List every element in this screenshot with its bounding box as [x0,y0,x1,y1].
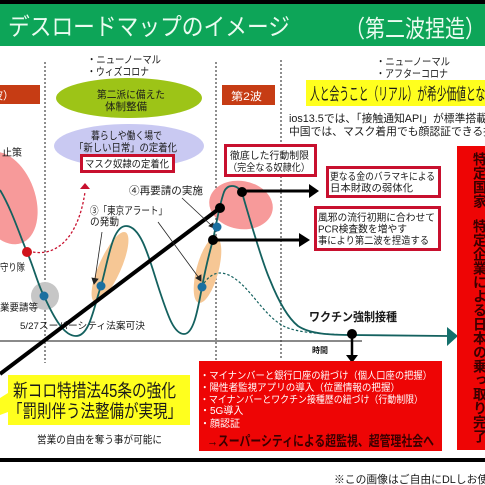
green ellipse: preparation: 第二派に備えた [97,88,165,101]
yellow callout: 新コロ特措法45条の強化 [13,381,176,401]
caption: freedom of business: 営業の自由を奪う事が可能に [37,433,162,446]
box: PCR: 事により第二波を捏造する [318,234,429,247]
text block: iOS: ios13.5では、「接触通知API」が標準搭載 [289,111,485,125]
label: Tokyo alert [90,204,167,228]
red box: mask [82,156,174,172]
red dotted arrow [33,183,90,253]
curve [0,186,447,336]
box: restrictions [226,146,316,176]
phase dividers [45,60,281,363]
box: spending: 更なる金のバラマキによる [330,170,435,183]
label: first wave [0,85,40,104]
list: after corona second line: ・アフターコロナ [376,68,448,80]
dashed scenario [202,273,352,335]
red panel: takeover [457,146,485,450]
header band [0,4,485,46]
red panel: surveillance: ・5G導入 [200,404,243,417]
thin arrow: alert two [158,222,201,281]
axis [0,340,362,342]
box: spending [328,168,440,196]
label: business request: 業要請等 [0,301,38,314]
highlight: grey circle [31,282,59,310]
box: restrictions: 徹底した行動制限 [230,149,309,162]
arrow: spending [241,184,319,198]
green ellipse: preparation: 体制整備 [105,100,147,113]
red panel: surveillance: ・マイナンバーと銀行口座の紐づけ（個人口座の把握） [200,369,432,382]
highlight: left pink [0,143,50,253]
title: デスロードマップのイメージ [8,14,290,41]
box: PCR: 風邪の流行初期に合わせて [318,211,435,224]
thin arrow: alert one [92,232,102,284]
lavender ellipse: new normal [54,124,204,168]
highlight: right pink [205,176,277,234]
green ellipse: preparation [56,78,202,118]
label: Tokyo alert: の発動 [90,215,119,228]
label: vaccination: ワクチン強制接種 [309,309,397,324]
red panel: surveillance: ・マイナンバーとワクチン接種歴の紐づけ（行動制限） [200,393,423,406]
box: restrictions: （完全なる奴隷化） [228,161,310,174]
thin arrow: request [182,198,214,228]
label: guards: 守り隊 [0,261,25,274]
highlight: orange two [188,234,227,306]
list: after corona: ・ニューノーマル [376,56,450,68]
bottom black rule [0,458,485,462]
yellow callout: 「罰則伴う法整備が実現」 [8,402,182,422]
label: time axis: 時間 [312,345,328,355]
red panel: surveillance [199,361,442,451]
list: with corona second line: ・ウィズコロナ [87,65,149,78]
box: PCR: PCR検査数を増やす [318,222,407,236]
arrow: PCR [213,233,310,247]
thick black diagonal [0,208,220,374]
label: second wave: 第2波 [231,89,262,103]
label: Tokyo alert: ③「東京アラート」 [90,204,167,217]
vaccination marker arrow [346,329,358,363]
top black bar [0,0,485,4]
red box: mask: マスク奴隷の定着化 [85,158,169,170]
list: with corona: ・ニューノーマル [87,54,161,66]
label: re-request: ④再要請の実施 [129,184,204,197]
red panel: surveillance: ・陽性者監視アプリの導入（位置情報の把握） [200,381,400,394]
yellow callout [0,375,190,425]
curve arrow head [447,327,458,346]
label: second wave [222,85,275,105]
label: super city bill: 5/27スーパーシティ法案可決 [20,320,146,332]
highlight: orange one [84,228,136,306]
red panel: surveillance: ・顔認証 [200,418,240,430]
curve markers [22,187,247,300]
label: stop measures: 止策 [2,146,22,159]
lavender ellipse: new normal: 暮らしや働く場で [91,129,162,142]
box: spending: 日本財政の弱体化 [330,182,413,194]
box: PCR [316,208,440,250]
lavender ellipse: new normal: 「新しい日常」の定着化 [74,141,177,154]
